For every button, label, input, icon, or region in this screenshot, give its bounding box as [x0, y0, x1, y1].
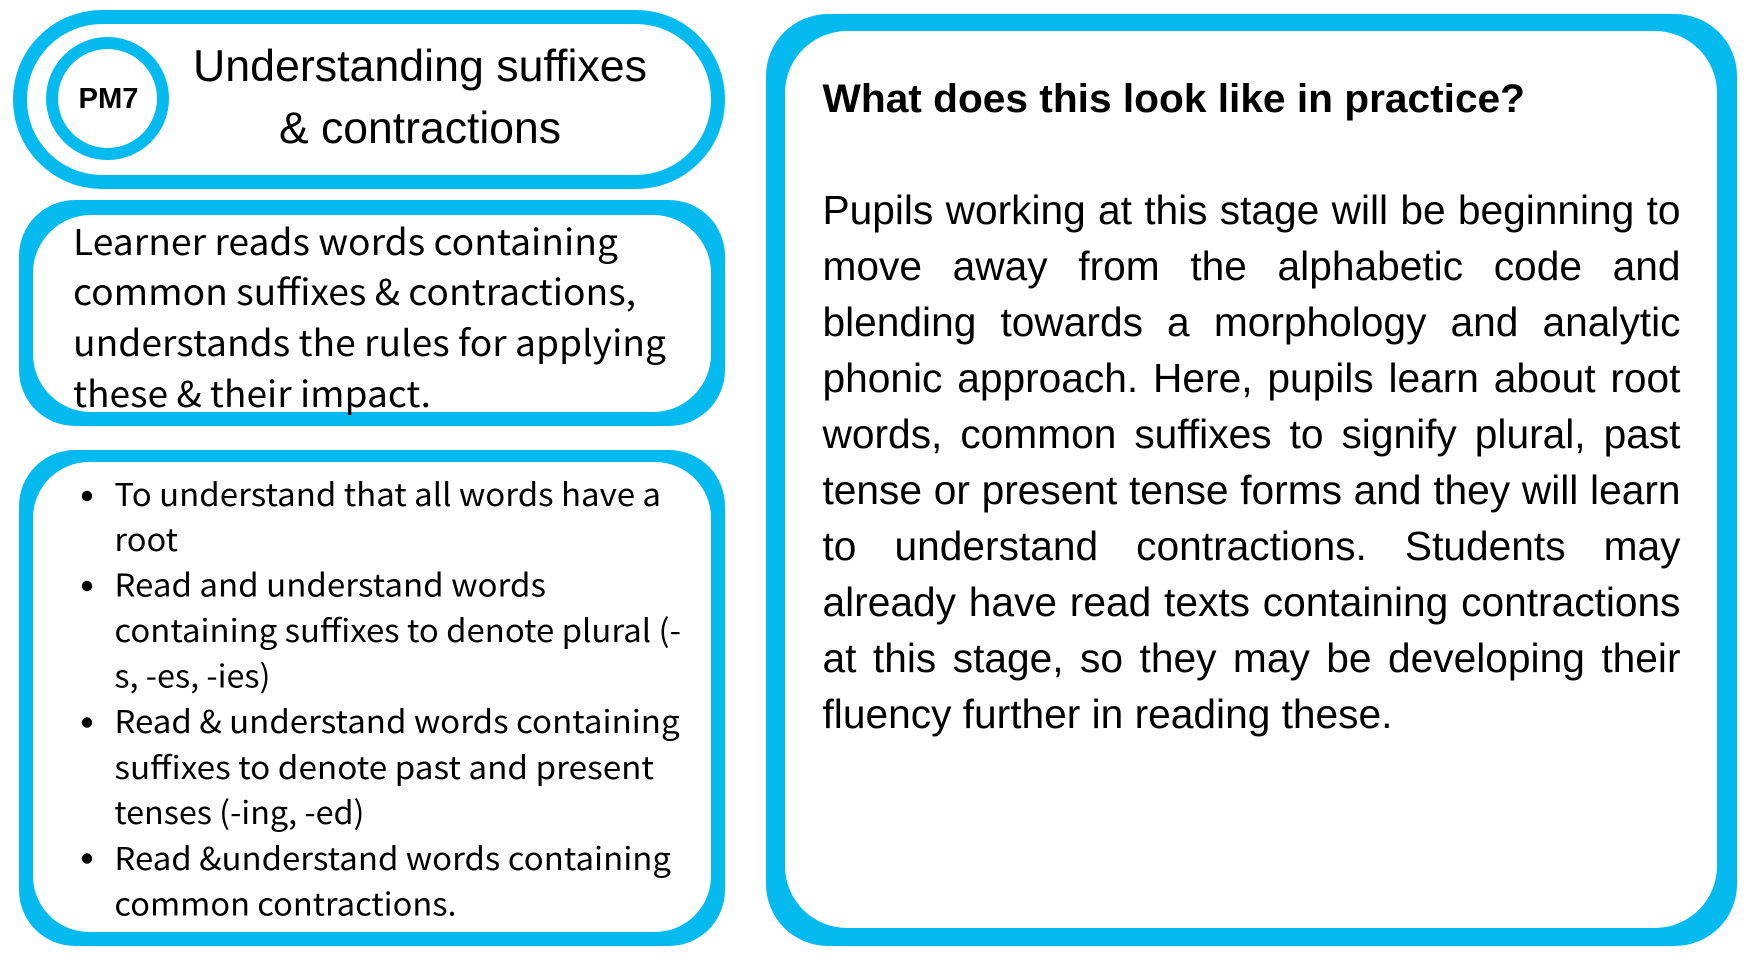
bullet 3: suffixes to denote past and present	[114, 743, 654, 789]
bullet 2	[82, 561, 681, 698]
practice body text: blending towards a morphology and analytic	[822, 299, 1680, 345]
practice body text: move away from the alphabetic code and	[822, 243, 1680, 289]
bullet 4	[82, 834, 671, 925]
bullet 3	[82, 697, 680, 834]
bullet 2: Read and understand words	[114, 561, 546, 607]
bullet 3: tenses (-ing, -ed)	[114, 788, 365, 834]
panel inner background	[785, 31, 1717, 928]
bullet 2: containing suffixes to denote plural (-	[114, 606, 681, 652]
bullet 4: Read &understand words containing	[114, 834, 671, 880]
panel: what does this look like in practice	[766, 14, 1737, 946]
practice body text: phonic approach. Here, pupils learn about root	[822, 355, 1680, 401]
title text: & contractions	[279, 104, 561, 153]
objectives bullet list	[82, 470, 681, 925]
panel inner background	[33, 462, 711, 932]
practice heading: What does this look like in practice?	[822, 77, 1525, 121]
practice body text: words, common suffixes to signify plural, past	[822, 411, 1680, 457]
panel: description	[19, 200, 725, 426]
practice body text: Pupils working at this stage will be beginning to	[822, 187, 1680, 233]
bullet 1: root	[114, 515, 178, 561]
title text: Understanding suffixes	[193, 42, 647, 91]
description text: Learner reads words containing	[73, 215, 618, 266]
panel: learning objectives	[19, 450, 725, 946]
badge inner circle	[58, 49, 157, 148]
title text	[193, 42, 647, 153]
practice body text	[822, 187, 1680, 737]
badge label: PM7	[78, 83, 138, 115]
bullet 2: s, -es, -ies)	[114, 652, 271, 698]
description text: common suffixes & contractions,	[73, 265, 636, 316]
description text: these & their impact.	[73, 367, 431, 418]
bullet 3: Read & understand words containing	[114, 697, 680, 743]
bullet 1	[82, 470, 661, 561]
panel inner background	[27, 24, 711, 175]
practice body text: already have read texts containing contractions	[822, 579, 1680, 625]
bullet 4: common contractions.	[114, 879, 457, 925]
practice body text: to understand contractions. Students may	[822, 523, 1680, 569]
bullet 1: To understand that all words have a	[114, 470, 661, 516]
description text: understands the rules for applying	[73, 316, 666, 367]
practice body text: tense or present tense forms and they will learn	[822, 467, 1680, 513]
panel: title pill	[13, 10, 725, 189]
panel inner background	[33, 214, 711, 412]
practice body text: fluency further in reading these.	[822, 691, 1392, 737]
description text	[73, 215, 666, 418]
badge: PM7 circle	[46, 37, 169, 160]
practice body text: at this stage, so they may be developing their	[822, 635, 1680, 681]
